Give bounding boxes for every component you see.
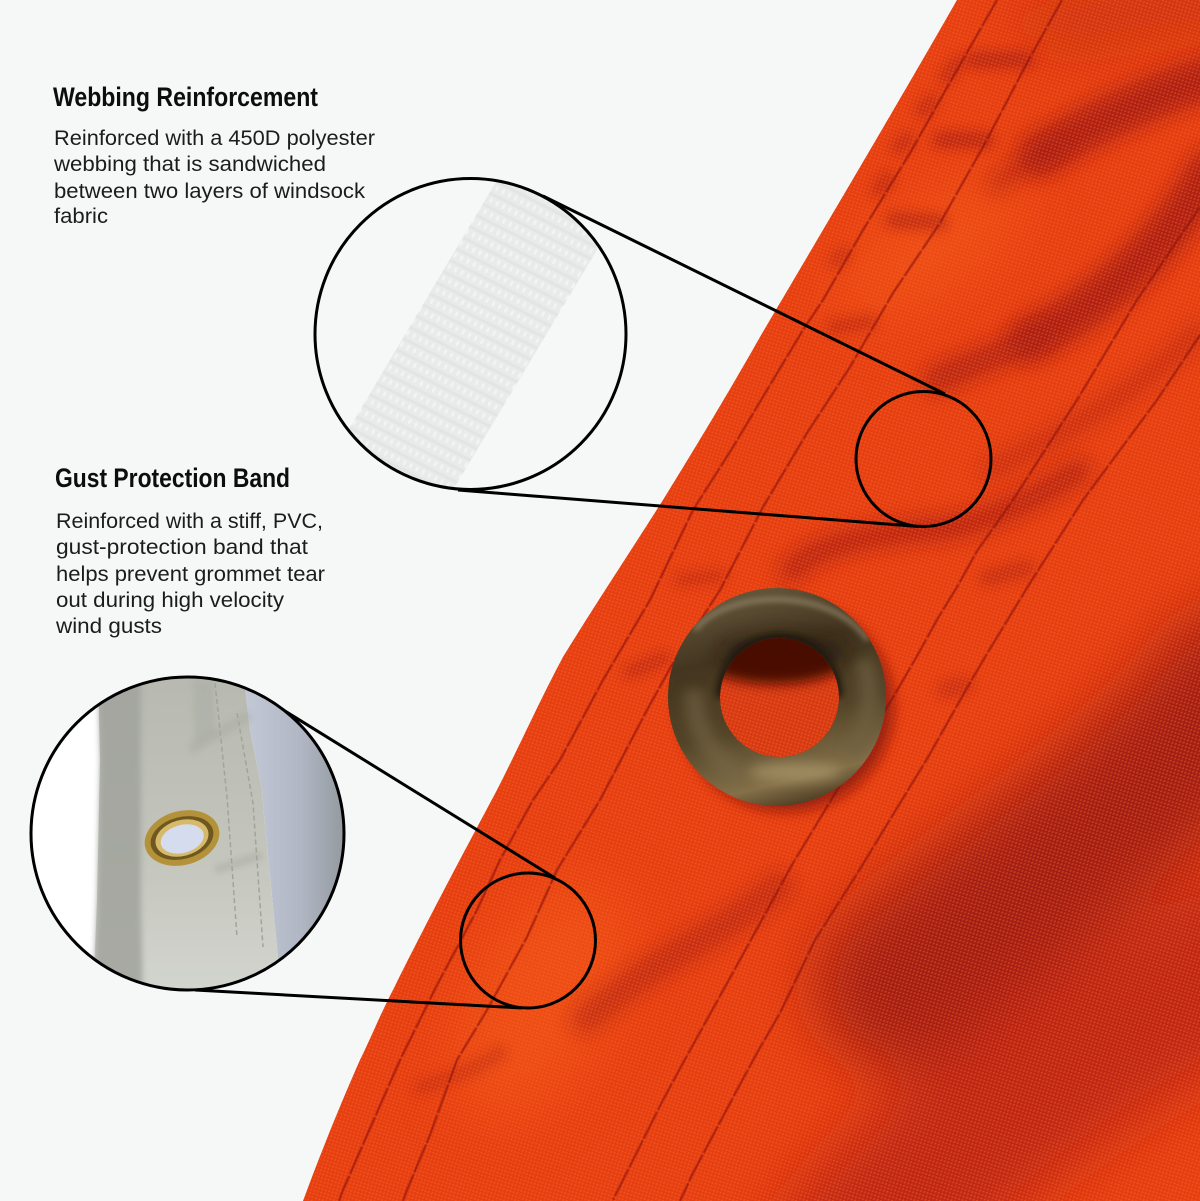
fabric weave texture	[290, 0, 1200, 1201]
text block: gust band description: Reinforced with a stiff, PVC,	[56, 510, 323, 533]
small brass grommet	[144, 810, 220, 866]
grommet shadow	[678, 600, 894, 812]
magnified circle: white polyester webbing	[315, 170, 626, 500]
callout lines: gust band	[195, 703, 555, 1008]
icon: brass grommet	[660, 580, 895, 815]
bright highlights	[461, 190, 1006, 1106]
callout lines: webbing	[458, 196, 945, 526]
heading: Webbing Reinforcement: Webbing Reinforcement	[53, 82, 318, 112]
text block: webbing description: fabric	[54, 205, 108, 228]
text block: webbing description: Reinforced with a 450D polyester	[54, 127, 375, 150]
text block: webbing description: webbing that is sandwiched	[53, 153, 326, 176]
magnifier: small circle on fabric (gust band)	[460, 873, 596, 1008]
wrinkle shadows	[420, 60, 1200, 1088]
heading: Gust Protection Band: Gust Protection Band	[55, 463, 290, 493]
text block: gust band description	[55, 510, 325, 638]
large shadow fold	[860, 0, 1200, 1201]
text block: gust band description: out during high velocity	[56, 589, 285, 612]
text block: webbing description: between two layers of windsock	[54, 180, 366, 203]
grommet ring	[668, 588, 886, 806]
text block: gust band description: helps prevent grommet tear	[56, 563, 325, 586]
magnified circle: gust protection band with grommet	[31, 670, 360, 1000]
grommet hole showing fabric	[720, 638, 839, 757]
stitched seams	[339, 0, 1200, 1201]
panel: orange windsock fabric photo	[290, 0, 1200, 1201]
magnifier: small circle on fabric (webbing)	[856, 392, 991, 526]
text block: gust band description: gust-protection band that	[56, 536, 308, 559]
text block: webbing description	[53, 127, 375, 228]
text block: gust band description: wind gusts	[55, 615, 162, 638]
